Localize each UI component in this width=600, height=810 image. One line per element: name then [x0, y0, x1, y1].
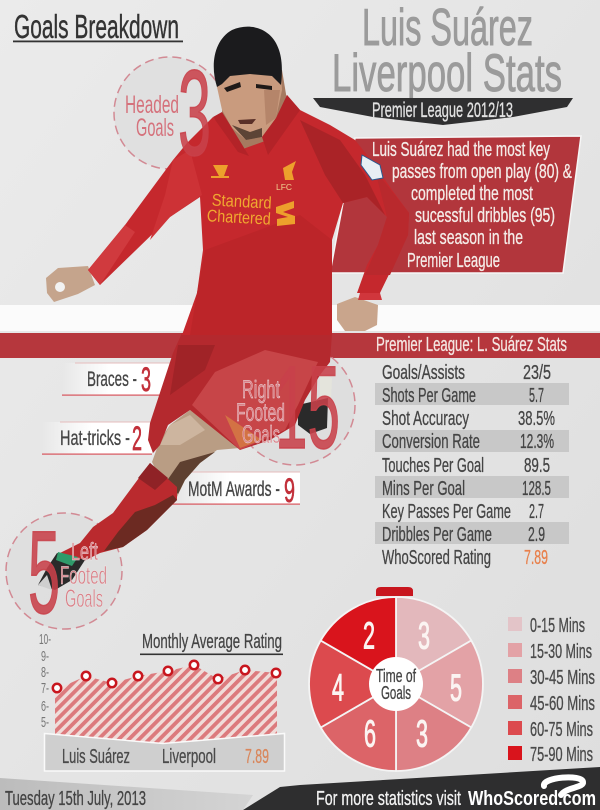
player illustration	[38, 27, 409, 590]
liver bird crest: LFC	[276, 183, 292, 192]
callout: Hat-tricks: 2	[132, 420, 142, 458]
panel: key passes summary background	[330, 136, 581, 273]
sponsor Standard Chartered: Standard	[211, 191, 272, 213]
right footed goals number and label	[236, 342, 340, 474]
pie slices	[309, 597, 483, 771]
table: season stats: Shot Accuracy	[382, 408, 469, 430]
table: season stats: 12.3%	[520, 431, 554, 453]
chart legend box: Liverpool	[162, 746, 216, 768]
heading: Goals Breakdown: Goals Breakdown	[14, 8, 179, 45]
left boot	[38, 552, 85, 590]
table: season stats: 23/5	[523, 362, 551, 384]
pie values: 3	[416, 714, 428, 756]
collar	[213, 95, 300, 156]
y axis labels: 6-	[41, 698, 49, 715]
headed goals number and label: Goals	[136, 114, 174, 142]
table: season stats	[375, 362, 569, 569]
ribbon: Premier League 2012/13	[313, 98, 573, 125]
sponsor Standard Chartered: Chartered	[206, 206, 271, 229]
warrior logo	[211, 165, 229, 178]
title	[332, 0, 562, 103]
right footed goals number and label: Right	[242, 376, 280, 404]
footer: date strip: Tuesday 15th July, 2013	[5, 788, 146, 810]
pie values	[332, 616, 462, 756]
y axis labels: 7-	[41, 680, 49, 697]
pie values: 5	[450, 668, 462, 710]
y axis labels	[39, 631, 51, 731]
chart legend box: 7.89	[245, 746, 269, 768]
pie top tab	[376, 587, 413, 596]
text block: key passes summary: completed the most	[411, 183, 533, 205]
icon: question mark logo	[544, 777, 583, 795]
shorts	[148, 333, 332, 453]
chart: monthly average rating	[39, 631, 284, 771]
footer: WhoScored banner	[243, 767, 600, 810]
table: season stats: 7.89	[524, 547, 548, 569]
liver bird crest	[276, 161, 296, 192]
chart title: Monthly Average Rating	[142, 631, 282, 653]
chart legend box	[44, 734, 284, 771]
text block: key passes summary	[372, 139, 572, 272]
left footed goals number and label: Footed	[60, 562, 107, 590]
ribbon: Premier League 2012/13: Premier League 2012/13	[372, 99, 513, 122]
pie values: 4	[332, 668, 344, 710]
table: season stats: Key Passes Per Game	[382, 501, 511, 523]
left sock	[60, 463, 177, 563]
hair	[214, 27, 282, 87]
pie centre label	[369, 657, 423, 711]
left footed goals number and label: Goals	[65, 585, 103, 613]
callout: MotM Awards: 9	[284, 472, 295, 510]
table: season stats: 89.5	[524, 455, 550, 477]
circle: headed goals	[114, 57, 226, 169]
table: season stats: 128.5	[522, 478, 551, 500]
y axis labels: 9-	[41, 648, 49, 665]
right footed goals number and label: Footed	[236, 399, 285, 427]
footer: WhoScored banner: For more statistics visit	[316, 788, 461, 810]
league sleeve badge	[361, 155, 383, 180]
y axis labels: 8-	[41, 664, 49, 681]
pie values: 6	[364, 714, 376, 756]
sponsor Standard Chartered	[206, 190, 272, 229]
text: 3	[178, 45, 211, 181]
table: season stats: 2.9	[528, 524, 545, 546]
right footed goals number and label: Goals	[242, 421, 280, 449]
panel: red stats band	[0, 333, 600, 358]
table: season stats: 5.7	[529, 385, 544, 407]
table: season stats: Touches Per Goal	[382, 455, 484, 477]
table: season stats: 2.7	[529, 501, 544, 523]
hatched area	[55, 665, 277, 746]
left footed goals number and label: 5	[28, 507, 60, 639]
callout: Hat-tricks	[42, 420, 152, 458]
table: season stats: Goals/Assists	[382, 362, 465, 384]
pie centre label: Goals	[381, 683, 411, 703]
table: season stats: 38.5%	[518, 408, 555, 430]
chart: time of goals pie	[309, 587, 483, 771]
callout: Braces: Braces -	[87, 368, 137, 391]
sponsor symbol	[276, 201, 295, 226]
chart legend box: Luis Suárez	[62, 746, 130, 768]
text block: key passes summary: Premier League	[407, 250, 500, 272]
neck and face	[217, 60, 287, 150]
text: 15	[275, 342, 340, 474]
callout: Braces	[62, 361, 170, 399]
legend: time of goals	[508, 615, 595, 766]
callout: Hat-tricks: Hat-tricks -	[60, 427, 130, 450]
text block: key passes summary: last season in the	[414, 227, 523, 249]
table: season stats: Conversion Rate	[382, 431, 480, 453]
callout: MotM Awards	[172, 472, 300, 510]
table: season stats: WhoScored Rating	[382, 547, 491, 569]
left thigh	[152, 410, 240, 497]
pie values: 3	[418, 616, 430, 658]
right hand	[337, 297, 378, 331]
jersey	[88, 95, 409, 335]
table: season stats: Shots Per Game	[382, 385, 476, 407]
pie centre label: Time of	[376, 666, 417, 686]
left hand	[46, 266, 95, 302]
callout: MotM Awards: MotM Awards -	[188, 478, 280, 501]
left footed goals number and label: Left	[71, 538, 98, 566]
circle: right footed goals	[235, 345, 355, 465]
y axis labels: 5-	[41, 714, 49, 731]
table: season stats: Mins Per Goal	[382, 478, 465, 500]
circle: left footed goals	[6, 513, 122, 629]
callout: Braces: 3	[141, 361, 151, 399]
rating points	[53, 661, 280, 692]
y axis labels: 10-	[39, 631, 51, 648]
table: season stats: Dribbles Per Game	[382, 524, 492, 546]
pie values: 2	[363, 616, 375, 658]
right foot	[298, 372, 332, 434]
headed goals number and label	[125, 45, 211, 181]
footer: date strip	[0, 778, 253, 810]
headed goals number and label: Headed	[125, 91, 179, 119]
